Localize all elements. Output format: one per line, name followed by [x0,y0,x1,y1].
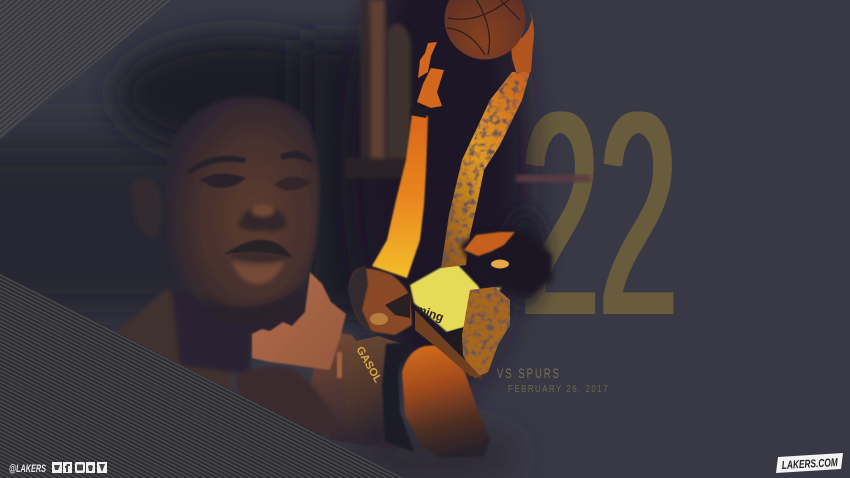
upper lip [228,252,290,262]
face highlight [464,232,515,256]
moustache [224,240,293,258]
date: FEBRUARY 26, 2017 [508,383,609,395]
hand [236,366,338,442]
jersey name: GASOL [353,344,384,385]
hand and fingers [417,42,444,108]
player: tattooed dunker [410,10,552,378]
left eye [199,173,246,188]
shirt right [310,330,395,450]
tattoo upper arm [462,287,510,378]
lakers.com badge [776,453,843,473]
social icons [52,462,107,473]
right eyebrow [280,151,313,163]
hand [510,10,534,72]
neck [172,290,305,375]
chin beard [205,285,303,324]
jersey [410,263,503,332]
lower lip [232,262,284,284]
top-left striped triangle [0,0,172,140]
background pillar [345,0,413,178]
social handle: @LAKERS [9,463,46,475]
player: Gasol [345,42,490,458]
forearm across [415,310,482,378]
basketball [444,0,526,60]
dark silhouette behind players [0,0,547,478]
beard [385,292,410,318]
wrist band [410,106,428,118]
dark jersey strap [382,342,414,452]
ear [370,313,388,325]
raised arm [372,115,428,278]
large number 22: 22 [521,53,677,376]
bottom-left striped triangle [0,273,405,478]
back [402,345,490,458]
ear [130,178,162,240]
right eye [274,177,312,190]
jersey [345,336,406,442]
ear [491,260,509,268]
jersey text: ming [414,302,446,325]
towel [252,272,346,370]
shoulder strap [447,326,472,355]
player: Ingram portrait [100,97,395,450]
nose [238,203,287,231]
head [166,97,319,316]
head [460,228,552,295]
caption [497,366,609,395]
head [350,268,412,335]
hair [348,266,372,332]
raised tattoo arm [441,72,530,268]
blurred horizontal streak [516,175,591,182]
left shoulder [100,288,240,440]
shirt letter [337,352,342,378]
left eyebrow [186,156,246,174]
opponent: VS SPURS [497,366,561,381]
